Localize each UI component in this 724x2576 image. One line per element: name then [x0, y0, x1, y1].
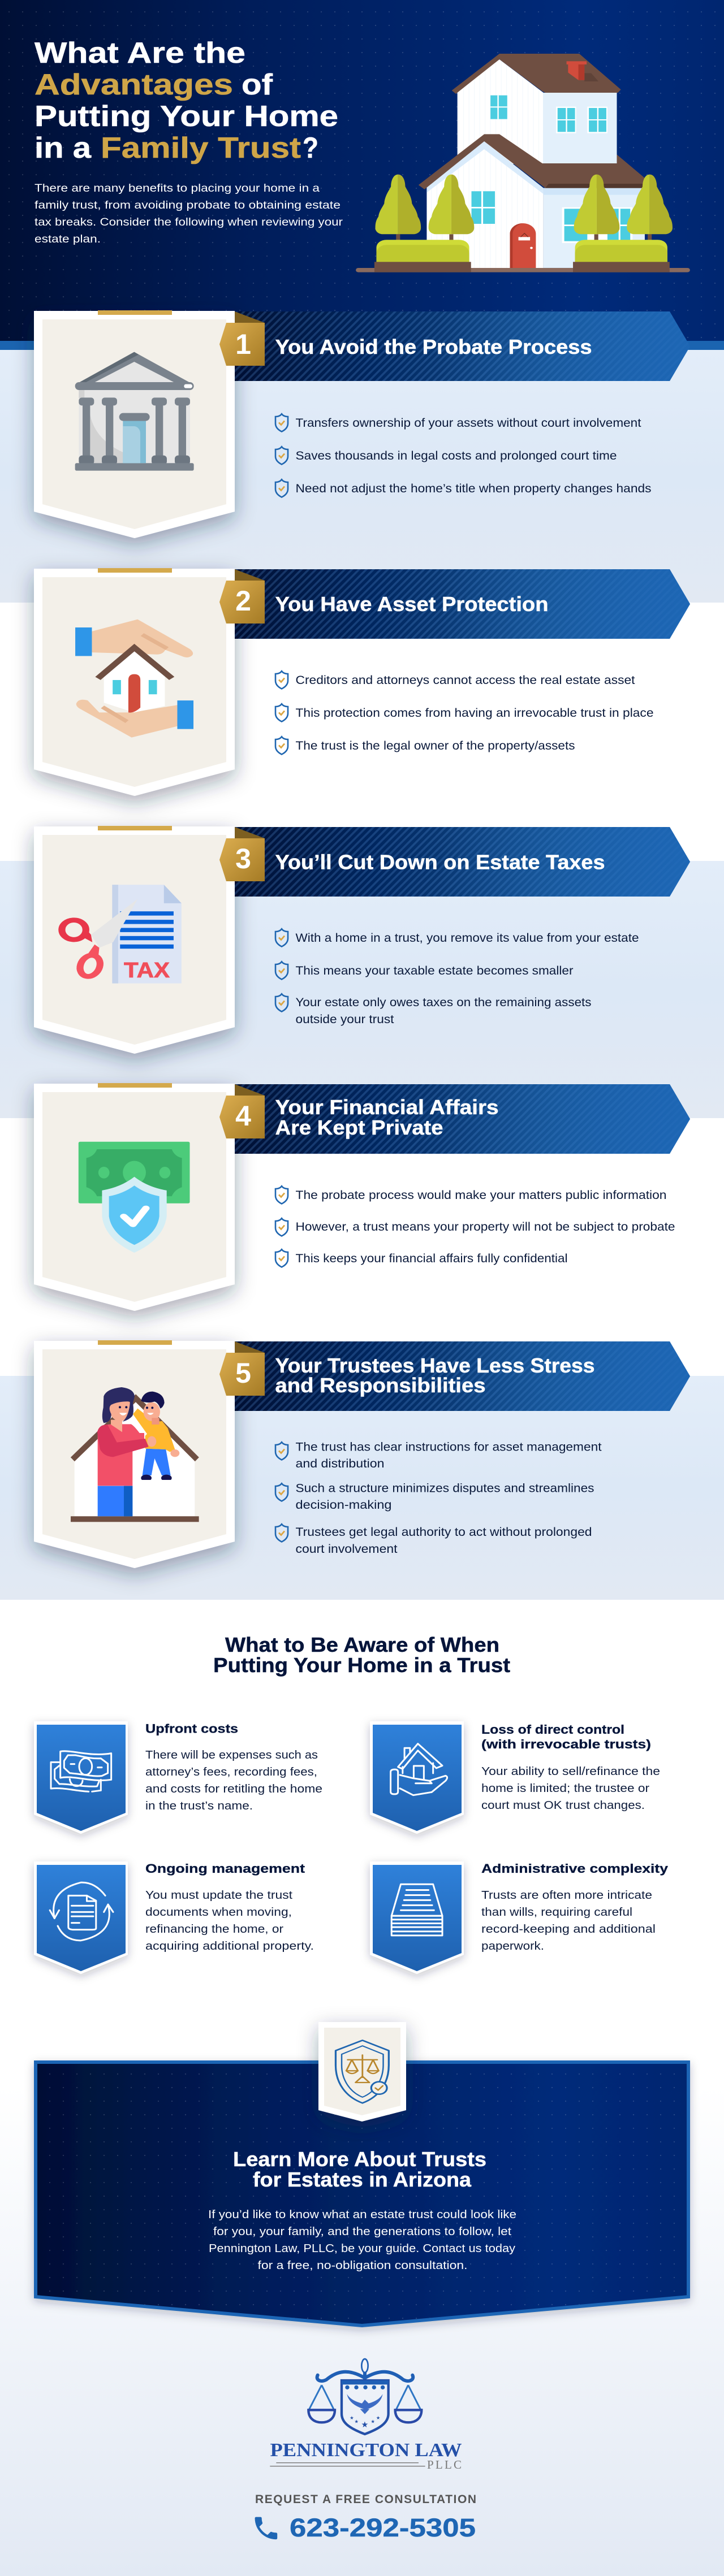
- number 3: 3: [235, 843, 251, 874]
- phone number: 623-292-5305: [290, 2513, 476, 2542]
- bullet list 5: court involvement: [295, 1543, 398, 1556]
- bullet list 1: [275, 414, 652, 497]
- icon: scissors cutting tax document: TAX: [124, 959, 170, 982]
- title: What Are the: [35, 37, 245, 70]
- bullet list 1: Need not adjust the home’s title when property changes hands: [295, 482, 652, 495]
- bullet list 1: Transfers ownership of your assets without court involvement: [295, 417, 641, 430]
- icon: phone: [255, 2517, 277, 2539]
- bullet list 5: decision-making: [295, 1499, 391, 1512]
- card title: Loss of direct control: [481, 1722, 624, 1737]
- heading 1: You Avoid the Probate Process: [275, 335, 592, 358]
- number 1: 1: [235, 328, 251, 360]
- card text: and costs for retitling the home: [145, 1783, 322, 1795]
- panel: benefit 3: [34, 826, 690, 1054]
- bullet list 3: outside your trust: [295, 1013, 394, 1026]
- card text: in the trust’s name.: [145, 1800, 253, 1812]
- panel: benefit 2: [34, 568, 690, 796]
- logo: Pennington Law: [270, 2359, 462, 2471]
- icon: scissors cutting tax document: [62, 885, 182, 984]
- header band: [0, 0, 724, 350]
- heading: what to be aware of: What to Be Aware of When: [225, 1633, 499, 1656]
- heading 5: and Responsibilities: [275, 1374, 485, 1397]
- cta text: for a free, no-obligation consultation.: [258, 2259, 467, 2272]
- title: Family Trust: [101, 132, 301, 164]
- panel: benefit 4: [34, 1083, 690, 1311]
- logo: Pennington Law: PLLC: [427, 2458, 462, 2471]
- heading: what to be aware of: Putting Your Home in a Trust: [213, 1653, 510, 1677]
- card title: Administrative complexity: [481, 1861, 669, 1876]
- icon badge: scales shield: [318, 2022, 406, 2122]
- icon: courthouse: [75, 352, 194, 471]
- bullet list 2: [275, 671, 654, 754]
- intro paragraph: There are many benefits to placing your home in a: [35, 182, 320, 194]
- cta text: Pennington Law, PLLC, be your guide. Contact us today: [209, 2242, 515, 2255]
- cta heading: for Estates in Arizona: [253, 2168, 472, 2191]
- card text: attorney’s fees, recording fees,: [145, 1766, 317, 1778]
- card text: home is limited; the trustee or: [481, 1782, 649, 1795]
- icon: money and shield: [79, 1142, 189, 1253]
- number 2: 2: [235, 585, 251, 617]
- logo: Pennington Law: ★: [354, 2419, 359, 2425]
- bullet list 4: [275, 1186, 675, 1267]
- panel: benefit 1: [34, 310, 690, 538]
- heading 4: Your Financial Affairs: [275, 1096, 499, 1119]
- card title: Upfront costs: [145, 1722, 238, 1735]
- card text: acquiring additional property.: [145, 1940, 314, 1952]
- card text: There will be expenses such as: [145, 1749, 318, 1761]
- bullet list 3: Your estate only owes taxes on the remaining assets: [295, 996, 592, 1009]
- card text: [145, 1889, 314, 1952]
- title: ?: [303, 132, 318, 164]
- intro paragraph: estate plan.: [35, 233, 101, 245]
- card text: than wills, requiring careful: [481, 1906, 632, 1919]
- bullet list 3: [275, 929, 639, 1026]
- bullet list 5: [275, 1440, 602, 1556]
- cta text: If you’d like to know what an estate trust could look like: [208, 2209, 516, 2221]
- icon: document with cycle arrows: [50, 1882, 113, 1941]
- title: Advantages: [35, 68, 233, 101]
- title: Putting Your Home: [35, 100, 338, 133]
- card: loss of direct control: [370, 1721, 660, 1834]
- heading: what to be aware of: [213, 1633, 510, 1677]
- card text: court must OK trust changes.: [481, 1799, 645, 1812]
- card title: (with irrevocable trusts): [481, 1737, 651, 1751]
- icon: banknotes: [51, 1751, 111, 1791]
- card text: paperwork.: [481, 1940, 544, 1952]
- icon: stack of papers: [391, 1884, 442, 1936]
- panel: benefit 5: [34, 1340, 690, 1568]
- intro paragraph: tax breaks. Consider the following when reviewing your: [35, 216, 343, 228]
- panel: call to action: [36, 2022, 688, 2326]
- card text: record-keeping and additional: [481, 1923, 656, 1936]
- heading 2: You Have Asset Protection: [275, 592, 549, 616]
- bullet list 5: Such a structure minimizes disputes and streamlines: [295, 1482, 594, 1495]
- card title: Ongoing management: [145, 1861, 305, 1876]
- bullet list 4: This keeps your financial affairs fully confidential: [295, 1252, 568, 1265]
- logo: Pennington Law: ★: [376, 2415, 381, 2421]
- bullet list 2: The trust is the legal owner of the property/assets: [295, 739, 575, 752]
- bullet list 2: This protection comes from having an irrevocable trust in place: [295, 707, 654, 720]
- cta text: for you, your family, and the generations to follow, let: [213, 2226, 511, 2238]
- card text: [145, 1749, 322, 1812]
- heading 3: You’ll Cut Down on Estate Taxes: [275, 850, 605, 874]
- card: administrative complexity: [370, 1861, 669, 1974]
- title: in a: [35, 132, 92, 164]
- intro paragraph: family trust, from avoiding probate to obtaining estate: [35, 199, 341, 211]
- heading 4: [275, 1096, 499, 1139]
- bullet list 5: The trust has clear instructions for asset management: [295, 1440, 602, 1454]
- logo: Pennington Law: ★: [350, 2415, 354, 2421]
- card: upfront costs: [34, 1721, 322, 1834]
- intro paragraph: [35, 182, 343, 245]
- icon: hands protecting house: [75, 620, 193, 738]
- icon: parent and child at home: [71, 1387, 199, 1522]
- number 4: 4: [235, 1100, 251, 1132]
- card text: [481, 1765, 660, 1812]
- card: ongoing management: [34, 1861, 314, 1974]
- card text: [481, 1889, 656, 1952]
- bullet list 3: This means your taxable estate becomes smaller: [295, 964, 574, 977]
- cta text: [208, 2209, 516, 2272]
- heading 4: Are Kept Private: [275, 1116, 443, 1139]
- bullet list 2: Creditors and attorneys cannot access the real estate asset: [295, 674, 635, 687]
- bullet list 4: However, a trust means your property will not be subject to probate: [295, 1220, 675, 1233]
- heading 5: Your Trustees Have Less Stress: [275, 1354, 595, 1377]
- icon: house in hand: [391, 1744, 447, 1795]
- title: of: [242, 68, 273, 101]
- bullet list 4: The probate process would make your matters public information: [295, 1189, 666, 1202]
- contact label: REQUEST A FREE CONSULTATION: [255, 2493, 476, 2506]
- card text: refinancing the home, or: [145, 1923, 283, 1936]
- bullet list 5: Trustees get legal authority to act without prolonged: [295, 1526, 592, 1539]
- bullet list 3: With a home in a trust, you remove its value from your estate: [295, 932, 639, 945]
- bullet list 5: and distribution: [295, 1457, 385, 1470]
- logo: Pennington Law: ★: [361, 2421, 369, 2430]
- card text: You must update the trust: [145, 1889, 293, 1902]
- card text: Your ability to sell/refinance the: [481, 1765, 660, 1778]
- cta heading: Learn More About Trusts: [233, 2148, 486, 2171]
- cta heading: [233, 2148, 486, 2191]
- logo: Pennington Law: ★: [370, 2419, 375, 2425]
- logo: Pennington Law: PENNINGTON LAW: [270, 2440, 462, 2461]
- bullet list 1: Saves thousands in legal costs and prolonged court time: [295, 449, 617, 462]
- number 5: 5: [235, 1357, 251, 1389]
- card text: documents when moving,: [145, 1906, 292, 1919]
- card title: [481, 1722, 651, 1751]
- card text: Trusts are often more intricate: [481, 1889, 652, 1902]
- title: [35, 37, 338, 164]
- heading 5: [275, 1354, 595, 1397]
- illustration: house with trees: [356, 54, 690, 272]
